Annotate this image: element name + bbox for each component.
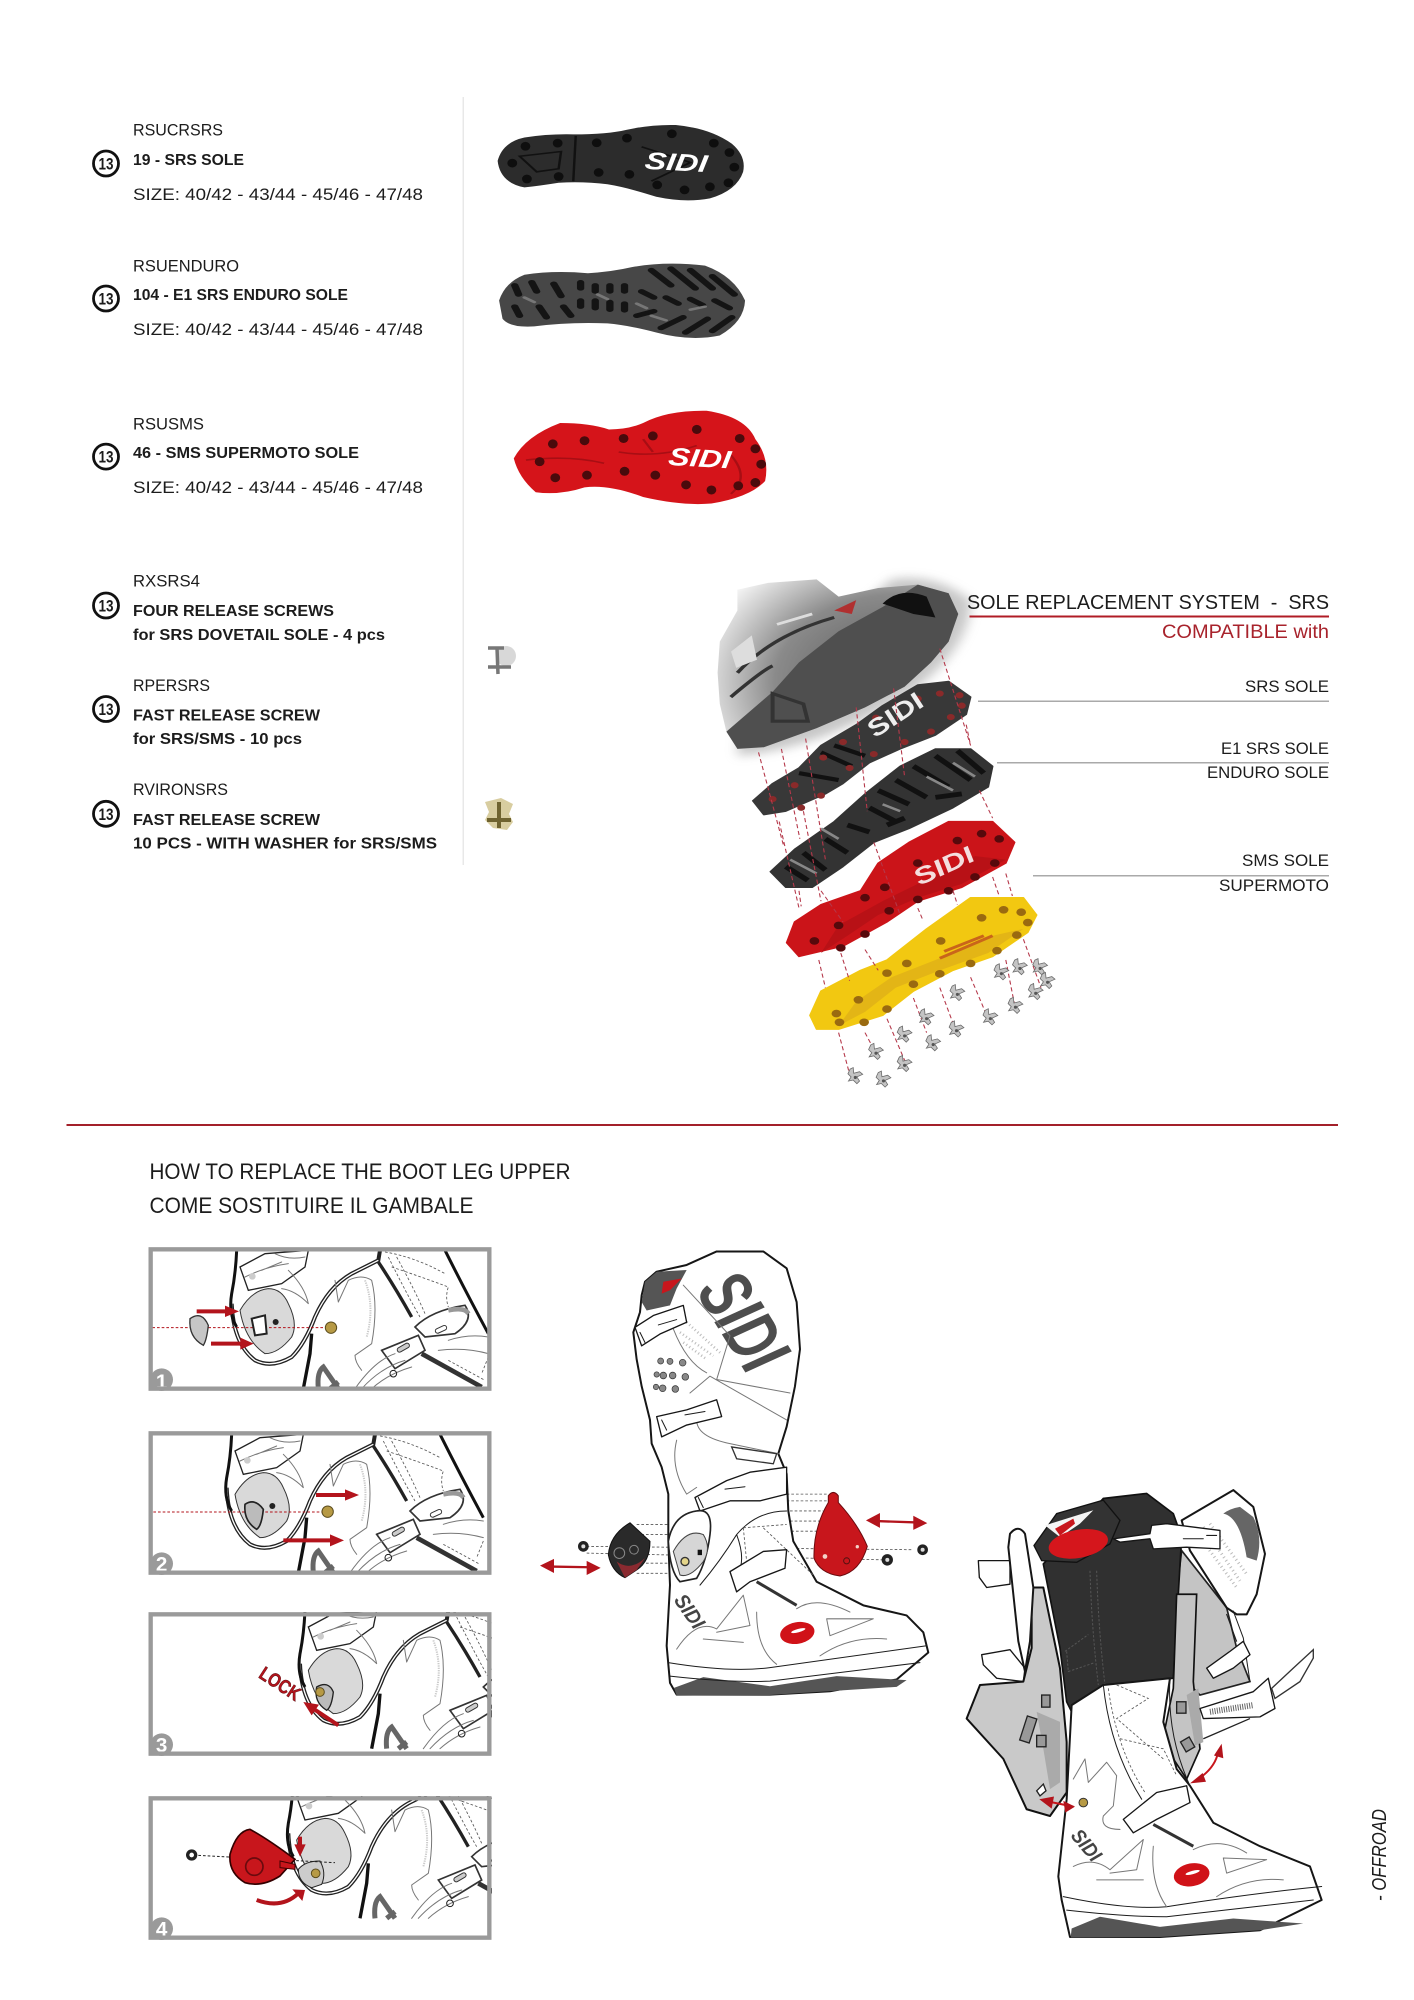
photo: black SRS sole: SIDI: [643, 147, 710, 178]
panel: step 4: 4: [156, 1918, 168, 1941]
left shell holes: [1037, 1784, 1046, 1796]
bolts: [578, 1541, 928, 1566]
red sole layer: [787, 822, 1015, 957]
red toe logo: [1172, 1860, 1211, 1889]
callout: SMS supermoto sole: [1033, 851, 1329, 895]
callout: E1 SRS enduro sole: [997, 739, 1329, 782]
item: RXSRS4: FOUR RELEASE SCREWS: [133, 603, 334, 620]
item: RSUENDURO: RSUENDURO: [133, 258, 239, 276]
item: RSUSMS: SIZE: 40/42 - 43/44 - 45/46 - 47/48: [133, 479, 423, 497]
side buckles: [1200, 1641, 1313, 1739]
callout: SMS supermoto sole: SMS SOLE: [1242, 851, 1329, 870]
SRS sole layer: [753, 681, 971, 815]
enduro sole layer: [770, 749, 993, 887]
heel SIDI mark: SIDI: [1066, 1825, 1106, 1867]
lower strap: [730, 1550, 787, 1592]
item: RXSRS4: RXSRS4: [133, 572, 200, 590]
callout: E1 SRS enduro sole: E1 SRS SOLE: [1221, 739, 1329, 758]
red toe logo: [778, 1619, 816, 1647]
ankle SIDI mark and toe details: SIDI: [669, 1590, 710, 1634]
panel: step 4: [148, 1796, 492, 1941]
dotted perforation: [680, 1322, 720, 1359]
ankle pivot plate: [668, 1511, 711, 1582]
item: RPERSRS: FAST RELEASE SCREW: [133, 708, 321, 724]
boot outline: [633, 1251, 928, 1695]
icon: four release screw: [488, 646, 516, 674]
red arrows: [1039, 1744, 1223, 1813]
screws: [848, 959, 1055, 1087]
SRS sole layer: SIDI: [859, 688, 932, 742]
black inner cap: [608, 1523, 650, 1578]
illustration: opened boot: [967, 1490, 1322, 1938]
boot upper: [718, 578, 971, 756]
red sole layer: SIDI: [907, 841, 981, 890]
panel: step 3: 3: [156, 1734, 167, 1757]
illustration: assembled boot: [540, 1251, 928, 1696]
item: RPERSRS: [94, 677, 321, 748]
heading: how to replace: HOW TO REPLACE THE BOOT LEG UPPER: [150, 1159, 570, 1184]
item: RSUSMS: RSUSMS: [133, 416, 204, 434]
heading: sole replacement system: [967, 591, 1329, 643]
inner shell right: [1177, 1551, 1250, 1695]
right shell with perforation: [1182, 1490, 1265, 1614]
item: RPERSRS: for SRS/SMS - 10 pcs: [133, 731, 302, 748]
item: RSUENDURO: SIZE: 40/42 - 43/44 - 45/46 - 47/48: [133, 321, 423, 339]
panel: step 2: [148, 1431, 492, 1576]
panel: step 2: 2: [156, 1553, 167, 1576]
item: RSUCRSRS: RSUCRSRS: [133, 122, 223, 140]
section divider: [66, 1124, 1338, 1126]
item: RSUCRSRS: [94, 122, 423, 204]
toe details: [1073, 1840, 1283, 1907]
item: RSUCRSRS: SIZE: 40/42 - 43/44 - 45/46 - 47/48: [133, 186, 423, 204]
ankle strap: [1123, 1786, 1190, 1833]
item: RSUSMS: [94, 416, 423, 497]
lower boot: [1058, 1678, 1322, 1937]
label: offroad: - OFFROAD: [1369, 1809, 1391, 1901]
double arrows: [540, 1513, 927, 1575]
icon: washer screw: [485, 798, 513, 830]
photo: red SMS supermoto sole: SIDI: [667, 442, 734, 474]
top strap: [1113, 1524, 1220, 1549]
photo: red SMS supermoto sole: [514, 411, 766, 504]
collar: [642, 1270, 687, 1310]
photo: E1 enduro sole: [499, 264, 745, 338]
item: RSUENDURO: 104 - E1 SRS ENDURO SOLE: [133, 287, 348, 304]
straps: [635, 1305, 787, 1511]
red tag: [1034, 1500, 1120, 1562]
panel: step 3: [148, 1612, 492, 1757]
heading: how to replace: [150, 1159, 570, 1218]
item: RSUCRSRS: 13: [98, 154, 114, 174]
item: RSUSMS: 13: [98, 448, 114, 467]
exploded view: boot and soles: [718, 578, 1055, 1087]
grey right strip: [1165, 1594, 1200, 1779]
dashed guide lines: [587, 1494, 913, 1573]
item: RSUCRSRS: 19 - SRS SOLE: [133, 152, 244, 169]
item: RSUENDURO: [94, 258, 423, 339]
item: RVIRONSRS: 10 PCS - WITH WASHER for SRS/SMS: [133, 836, 437, 852]
photo: black SRS sole: [498, 125, 744, 200]
item: RVIRONSRS: RVIRONSRS: [133, 781, 228, 799]
boot sole: [674, 1676, 907, 1696]
panel: step 1: [148, 1247, 492, 1394]
dashed assembly lines: [759, 649, 1041, 1074]
panel: step 3: LOCK: [255, 1664, 304, 1706]
item: RSUENDURO: 13: [98, 290, 114, 308]
lower shell lines: [700, 1511, 787, 1585]
yellow sole layer: [810, 898, 1037, 1029]
item: RVIRONSRS: [94, 781, 437, 852]
item: RXSRS4: for SRS DOVETAIL SOLE - 4 pcs: [133, 627, 385, 644]
lower boot interior: [1103, 1678, 1190, 1799]
callout: SMS supermoto sole: SUPERMOTO: [1219, 876, 1329, 895]
panel: step 1: 1: [156, 1371, 167, 1394]
item: RPERSRS: 13: [98, 700, 114, 719]
sole: [1071, 1917, 1303, 1938]
callout: E1 SRS enduro sole: ENDURO SOLE: [1207, 763, 1329, 782]
item: RVIRONSRS: 13: [98, 805, 114, 824]
heading: sole replacement system: COMPATIBLE with: [1162, 622, 1329, 643]
black liner: [1043, 1493, 1182, 1712]
callout: SRS sole: SRS SOLE: [1245, 677, 1329, 696]
red outer cap: [814, 1492, 867, 1576]
panel: product list: [94, 122, 437, 852]
white left tongue: [1008, 1529, 1033, 1672]
item: RPERSRS: RPERSRS: [133, 677, 210, 695]
item: RSUSMS: 46 - SMS SUPERMOTO SOLE: [133, 445, 359, 462]
grey left shell: [967, 1588, 1067, 1816]
item: RXSRS4: 13: [98, 596, 114, 616]
shin panel lines: [673, 1285, 790, 1494]
small left straps: [978, 1561, 1025, 1682]
column divider: [462, 97, 464, 865]
perforation holes: [653, 1358, 689, 1392]
item: RVIRONSRS: FAST RELEASE SCREW: [133, 812, 321, 829]
heading: how to replace: COME SOSTITUIRE IL GAMBALE: [150, 1193, 474, 1218]
nut: [1079, 1798, 1088, 1807]
item: RXSRS4: [94, 572, 385, 644]
SIDI logo on shin: SIDI: [682, 1256, 806, 1387]
heading: sole replacement system: SOLE REPLACEMENT SYSTEM - SRS: [967, 591, 1329, 614]
